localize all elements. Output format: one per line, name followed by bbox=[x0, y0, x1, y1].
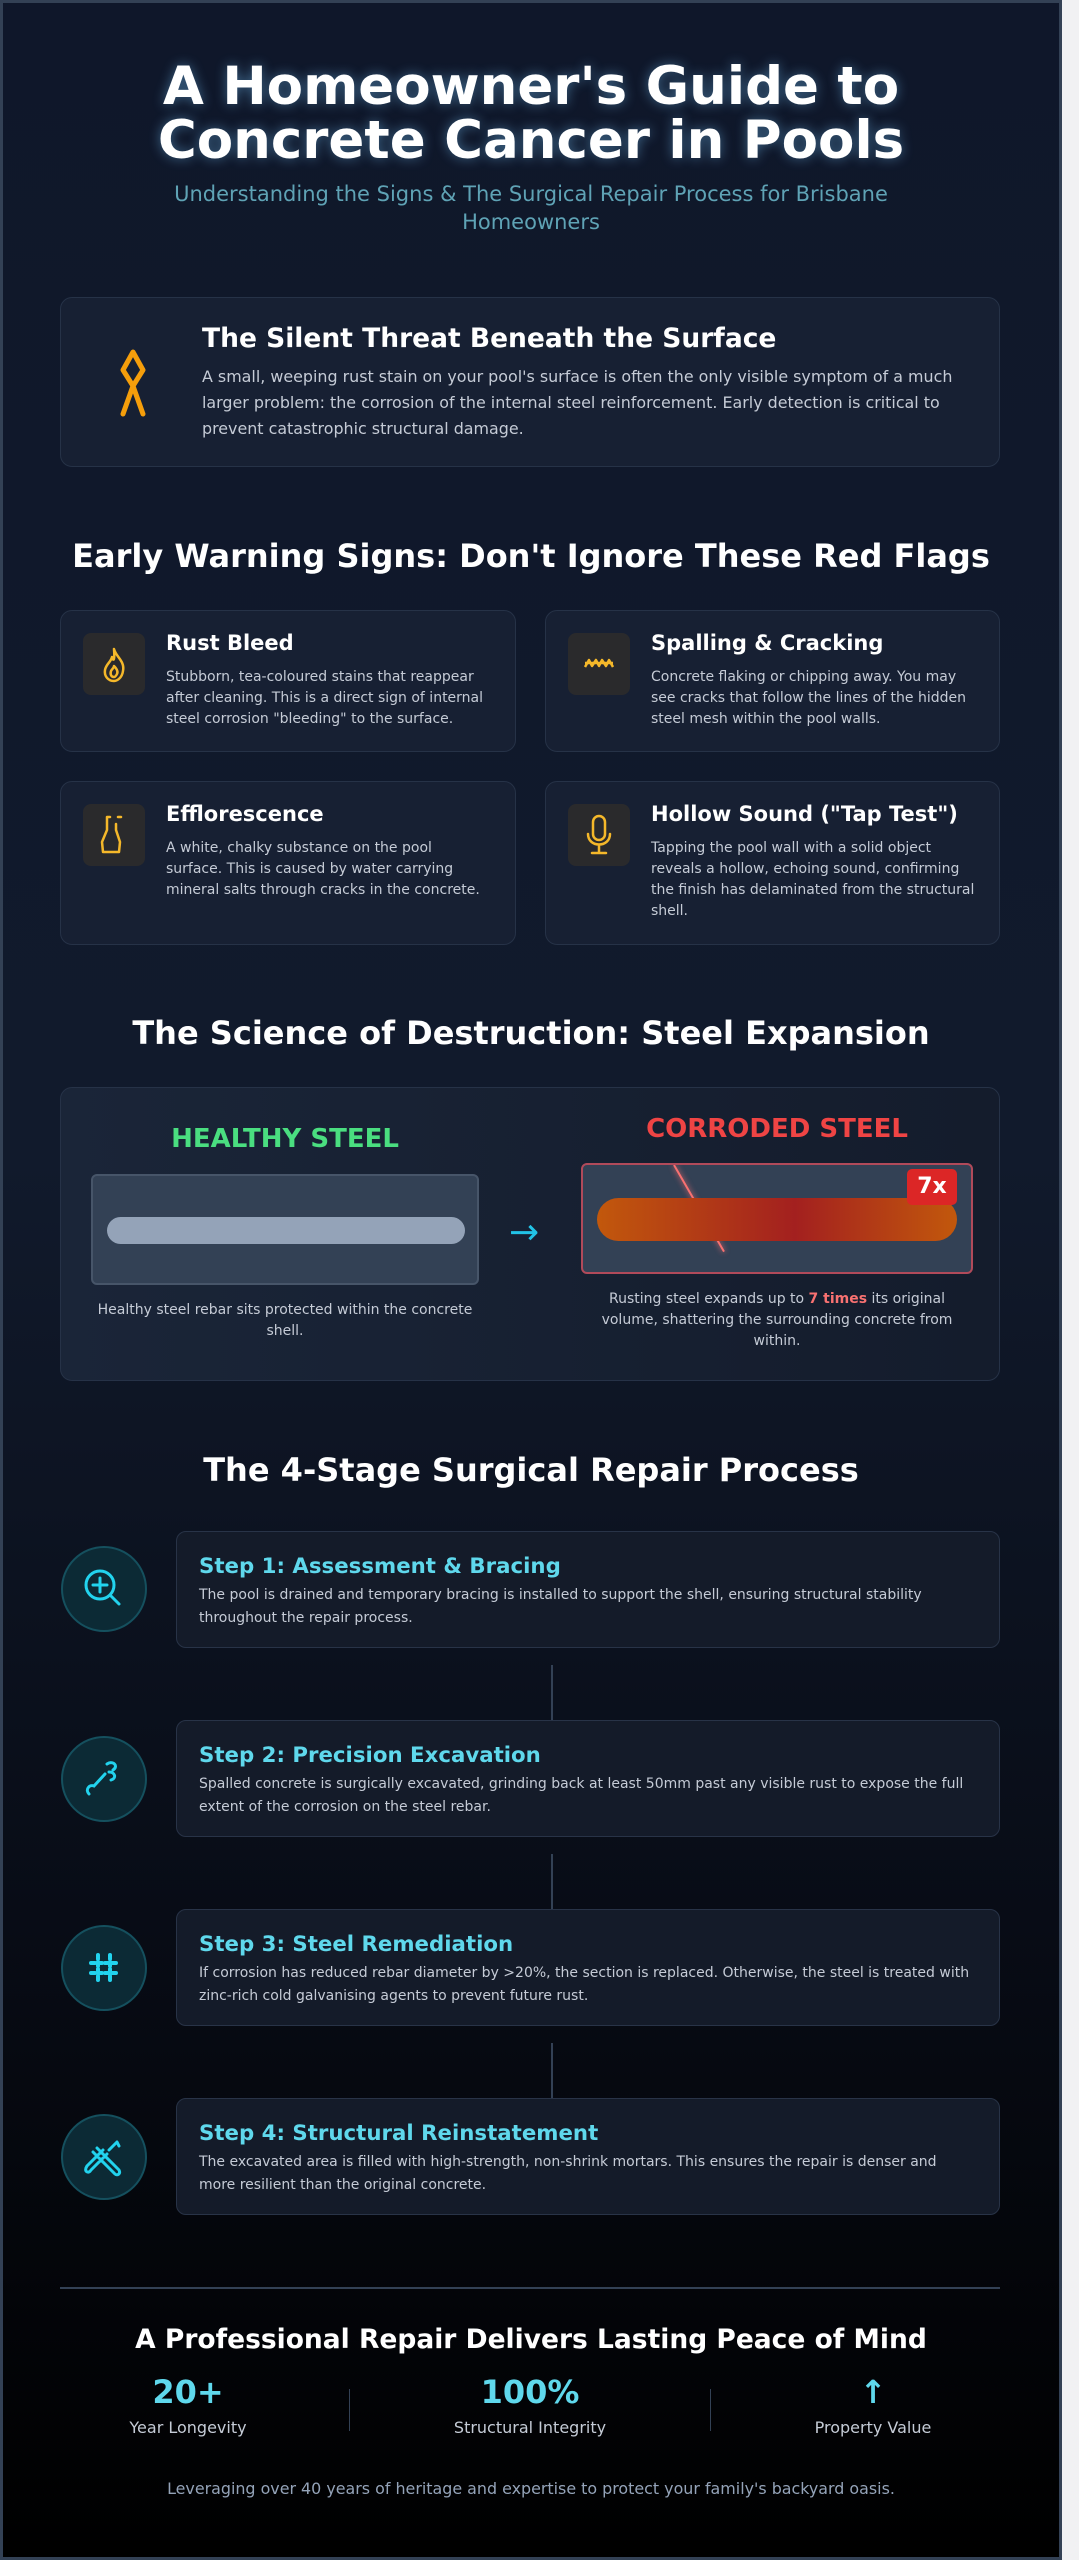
stats: Property Value bbox=[815, 2418, 931, 2437]
heading: early warning signs: Early Warning Signs: Don't Ignore These Red Flags bbox=[72, 537, 990, 575]
title: A Homeowner's Guide to bbox=[163, 56, 899, 117]
arrow: → bbox=[509, 1212, 539, 1253]
icon: rust drip bbox=[120, 350, 146, 416]
step 2: Step 2: Precision Excavation bbox=[199, 1743, 541, 1768]
card: spalling: Concrete flaking or chipping away. You may see cracks that follow the lines of the hidden steel mesh within the pool walls. bbox=[651, 669, 966, 727]
step 2: Spalled concrete is surgically excavated, grinding back at least 50mm past any visible rust to expose the full extent of the corrosion on the steel rebar. bbox=[199, 1776, 963, 1815]
body text: A small, weeping rust stain on your pool's surface is often the only visible symptom of a much larger problem: the corrosion of the internal steel reinforcement. Early detection is critical to prevent catastrophic structural damage. bbox=[202, 367, 952, 438]
healthy caption: Healthy steel rebar sits protected within the concrete shell. bbox=[98, 1302, 472, 1339]
heading: science: The Science of Destruction: Steel Expansion bbox=[132, 1014, 930, 1052]
footer heading: A Professional Repair Delivers Lasting Peace of Mind bbox=[135, 2324, 927, 2355]
step 4 icon: trowel bbox=[61, 2114, 147, 2200]
icon: flame bbox=[83, 633, 145, 695]
card: spalling: Spalling & Cracking bbox=[651, 631, 883, 655]
corroded caption: Rusting steel expands up to 7 times its original volume, shattering the surrounding concrete from within. bbox=[602, 1291, 952, 1349]
connector lines bbox=[551, 1665, 553, 1721]
healthy diagram bbox=[91, 1174, 479, 1285]
heading: repair process: The 4-Stage Surgical Repair Process bbox=[203, 1451, 859, 1489]
card: spalling bbox=[545, 610, 1000, 752]
step 3 bbox=[176, 1909, 1000, 2026]
card: efflorescence: Efflorescence bbox=[166, 802, 324, 826]
badge 7x: 7x bbox=[917, 1174, 947, 1199]
step 3: Step 3: Steel Remediation bbox=[199, 1932, 513, 1957]
stats: ↑ bbox=[860, 2373, 886, 2411]
step 1 bbox=[176, 1531, 1000, 1648]
title: Concrete Cancer in Pools bbox=[158, 110, 904, 171]
title bbox=[154, 56, 908, 171]
step 4: The excavated area is filled with high-strength, non-shrink mortars. This ensures the repair is denser and more resilient than the original concrete. bbox=[199, 2154, 937, 2193]
step 4 bbox=[176, 2098, 1000, 2215]
card: rust bleed: Stubborn, tea-coloured stains that reappear after cleaning. This is a direct sign of internal steel corrosion "bleeding" to the surface. bbox=[166, 669, 483, 727]
card: rust bleed: Rust Bleed bbox=[166, 631, 294, 655]
stats: Year Longevity bbox=[129, 2418, 247, 2437]
icon: cracks bbox=[568, 633, 630, 695]
badge 7x bbox=[907, 1169, 957, 1205]
step 1: The pool is drained and temporary bracing is installed to support the shell, ensuring structural stability throughout the repair process. bbox=[199, 1587, 922, 1626]
corroded label: CORRODED STEEL bbox=[646, 1114, 908, 1144]
card: efflorescence: A white, chalky substance on the pool surface. This is caused by water carrying mineral salts through cracks in the concrete. bbox=[166, 840, 480, 898]
heading: The Silent Threat Beneath the Surface bbox=[202, 323, 776, 354]
stats: Structural Integrity bbox=[454, 2418, 606, 2437]
subtitle: Understanding the Signs & The Surgical Repair Process for Brisbane Homeowners bbox=[174, 182, 888, 234]
card: efflorescence bbox=[60, 781, 516, 945]
card: hollow sound bbox=[545, 781, 1000, 945]
panel: steel expansion bbox=[60, 1087, 1000, 1381]
panel: silent threat bbox=[60, 297, 1000, 467]
healthy label: HEALTHY STEEL bbox=[171, 1124, 399, 1154]
step 2 bbox=[176, 1720, 1000, 1837]
stats: 100% bbox=[481, 2373, 579, 2411]
card: rust bleed bbox=[60, 610, 516, 752]
step 4: Step 4: Structural Reinstatement bbox=[199, 2121, 598, 2146]
step 3: If corrosion has reduced rebar diameter by >20%, the section is replaced. Otherwise, the steel is treated with zinc-rich cold galvanising agents to prevent future rust. bbox=[199, 1965, 969, 2004]
stats bbox=[129, 2373, 931, 2437]
footer note: Leveraging over 40 years of heritage and expertise to protect your family's backyard oasis. bbox=[167, 2479, 895, 2498]
icon: microphone bbox=[568, 804, 630, 866]
card: hollow sound: Tapping the pool wall with a solid object reveals a hollow, echoing sound, confirming the finish has delaminated from the structural shell. bbox=[651, 840, 974, 919]
step 2 icon: tool bbox=[61, 1736, 147, 1822]
step 1: Step 1: Assessment & Bracing bbox=[199, 1554, 561, 1579]
step 3 icon: grid bbox=[61, 1925, 147, 2011]
icon: flask bbox=[83, 804, 145, 866]
corroded diagram bbox=[581, 1163, 973, 1274]
card: hollow sound: Hollow Sound ("Tap Test") bbox=[651, 802, 958, 826]
stats: 20+ bbox=[152, 2373, 224, 2411]
step 1 icon: magnifier bbox=[61, 1546, 147, 1632]
